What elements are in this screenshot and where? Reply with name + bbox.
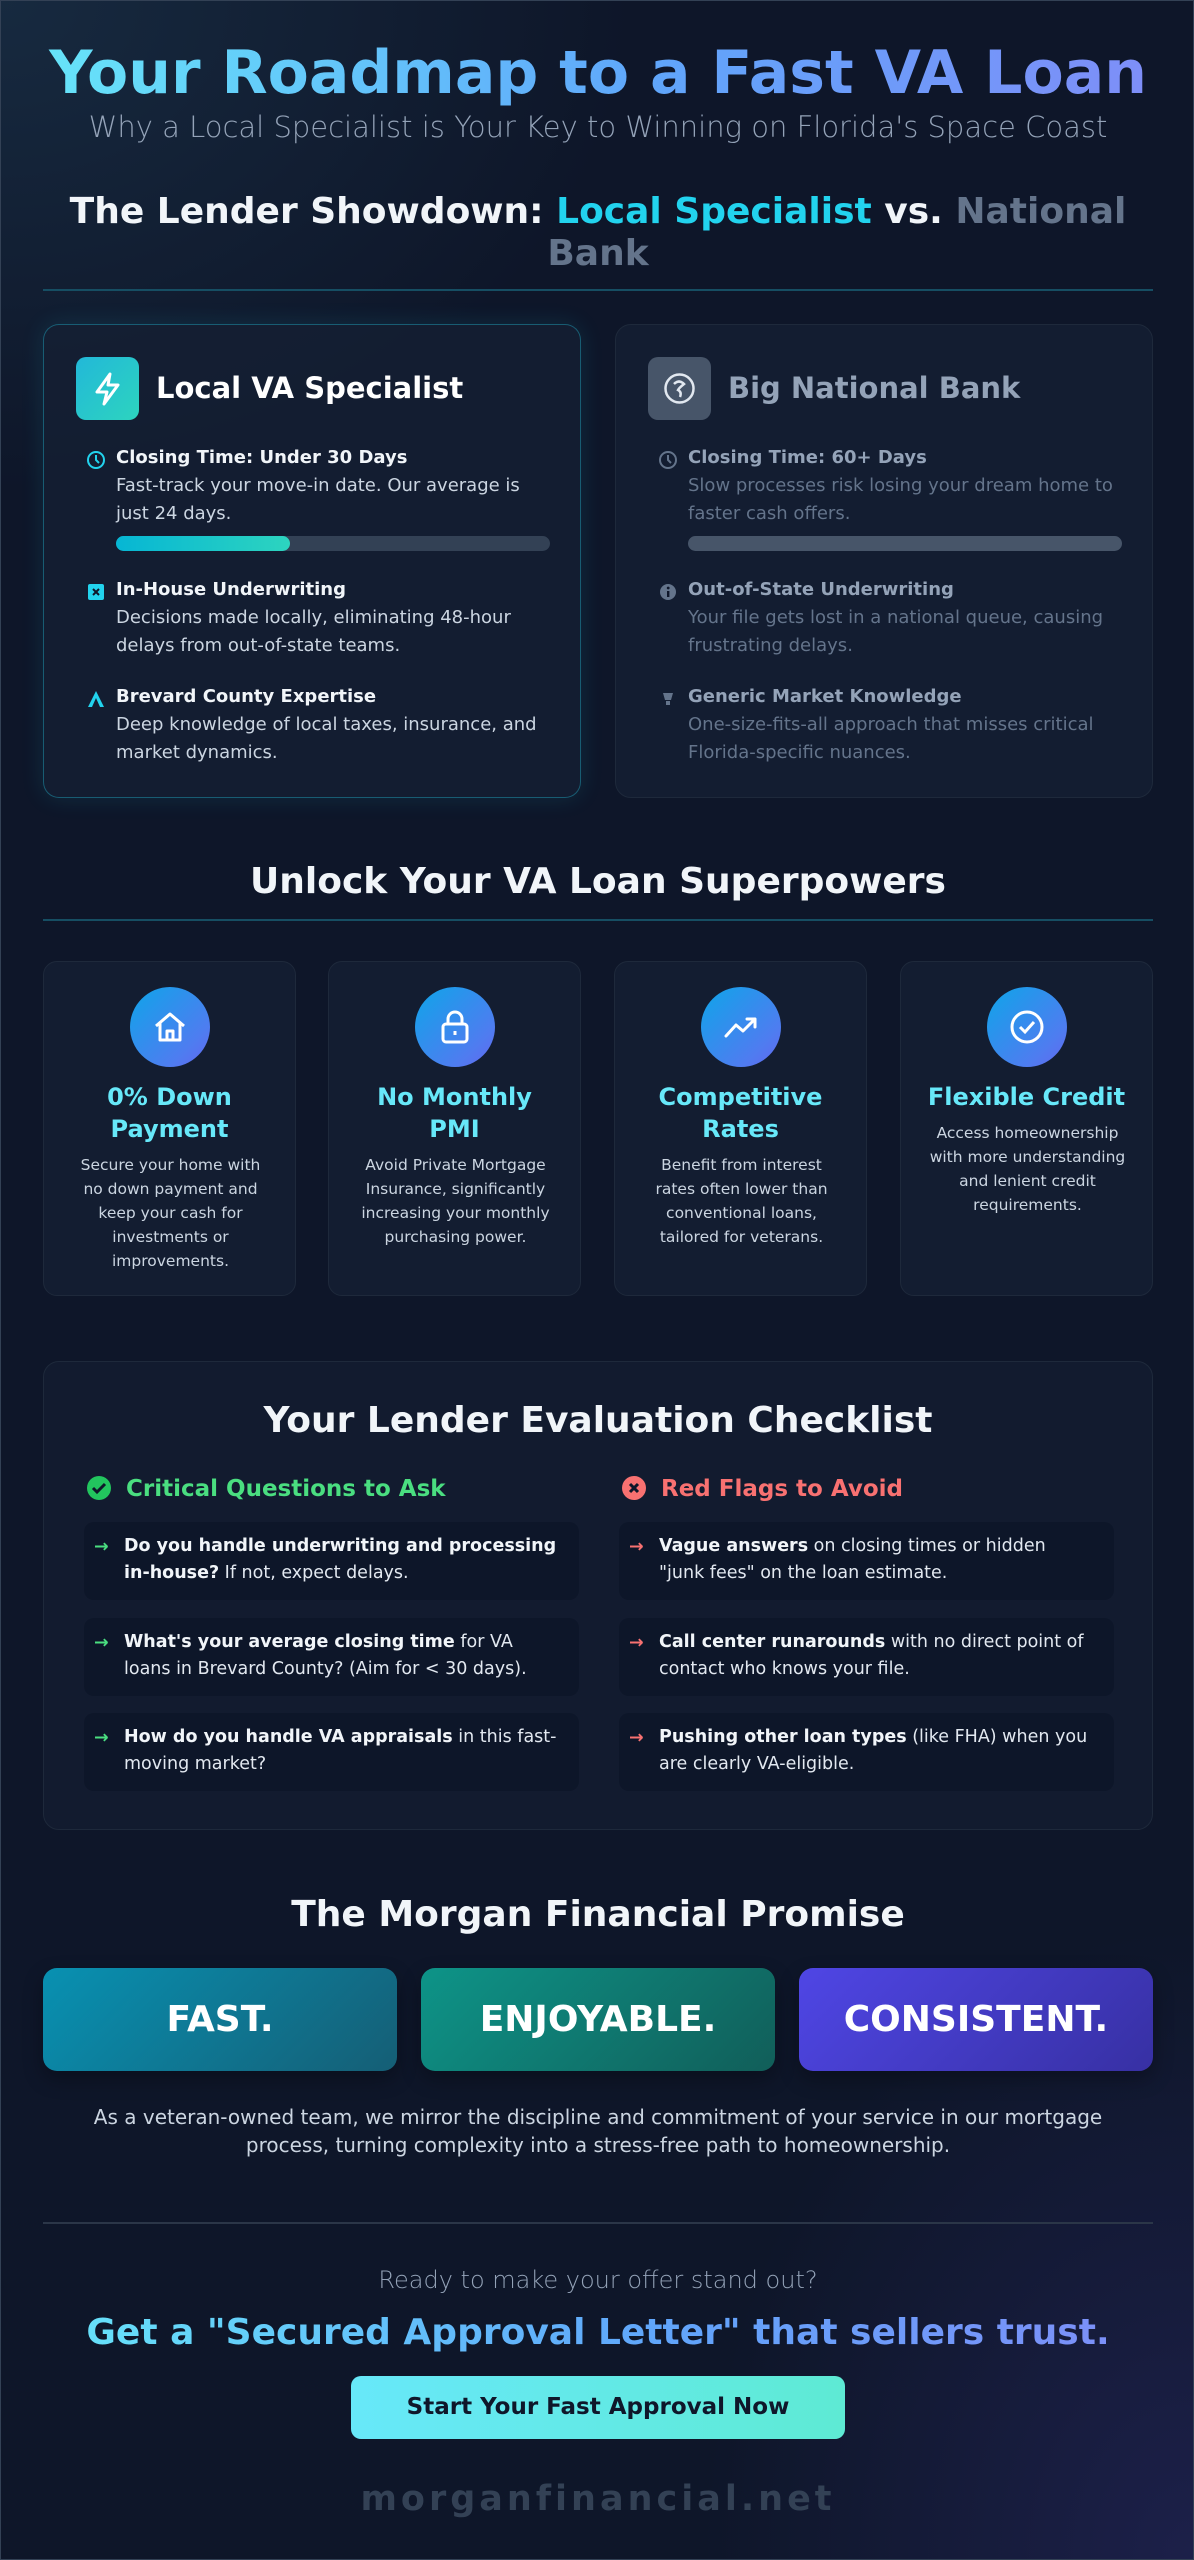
flag 2	[619, 1618, 1114, 1696]
flag 1: Vague answers on closing times or hidden "junk fees" on the loan estimate.	[659, 1536, 1046, 1583]
flag 2: →	[629, 1633, 644, 1653]
item: generic knowledge: Generic Market Knowledge	[688, 686, 962, 707]
cta prompt: Ready to make your offer stand out?	[378, 2266, 818, 2294]
card: no PMI: No Monthly	[377, 1083, 532, 1111]
flag 3	[619, 1713, 1114, 1791]
subtitle: Why a Local Specialist is Your Key to Winning on Florida's Space Coast	[89, 110, 1107, 144]
item: closing time	[87, 447, 550, 551]
card: no PMI: PMI	[429, 1115, 480, 1143]
promise: enjoyable	[421, 1968, 775, 2071]
item: in-house underwriting	[88, 579, 511, 656]
promise: fast: FAST.	[166, 1999, 274, 2040]
flag 3: Pushing other loan types (like FHA) when you are clearly VA-eligible.	[659, 1727, 1087, 1774]
card: flexible credit: Flexible Credit	[928, 1083, 1125, 1111]
question 1: →	[94, 1537, 109, 1557]
item: closing time: Fast-track your move-in date. Our average is just 24 days.	[116, 475, 520, 524]
footer url: morganfinancial.net	[360, 2479, 836, 2519]
card: competitive rates: Benefit from interest rates often lower than conventional loans, tailored for veterans.	[655, 1156, 828, 1246]
card title: Local VA Specialist	[156, 371, 463, 405]
progress bar	[688, 536, 1122, 551]
card: 0% down: 0% Down	[107, 1083, 232, 1111]
item: brevard expertise	[88, 686, 537, 763]
item: in-house underwriting: Decisions made locally, eliminating 48-hour delays from out-of-state teams.	[116, 607, 511, 656]
title: Your Roadmap to a Fast VA Loan	[49, 38, 1147, 108]
item: out-of-state	[660, 579, 1103, 656]
card title: Big National Bank	[728, 371, 1020, 405]
card: 0% down	[43, 961, 296, 1296]
heading: promise: The Morgan Financial Promise	[291, 1894, 905, 1935]
question 2	[84, 1618, 579, 1696]
panel: national bank	[615, 324, 1153, 798]
item: generic knowledge	[663, 686, 1094, 763]
question 3: →	[94, 1728, 109, 1748]
column heading: questions: Critical Questions to Ask	[126, 1476, 446, 1502]
promise: consistent	[799, 1968, 1153, 2071]
icon: check circle	[987, 987, 1067, 1067]
card: competitive rates: Rates	[702, 1115, 779, 1143]
card: flexible credit	[900, 961, 1153, 1296]
icon: trending up	[701, 987, 781, 1067]
panel: checklist	[43, 1361, 1153, 1830]
heading: superpowers: Unlock Your VA Loan Superpowers	[250, 861, 946, 902]
item: out-of-state: Your file gets lost in a national queue, causing frustrating delays.	[688, 607, 1103, 656]
flag 3: →	[629, 1728, 644, 1748]
question 2: What's your average closing time for VA loans in Brevard County? (Aim for < 30 days).	[124, 1632, 527, 1679]
question 3: How do you handle VA appraisals in this fast-moving market?	[124, 1727, 556, 1774]
flag 1: →	[629, 1537, 644, 1557]
promise: enjoyable: ENJOYABLE.	[480, 1999, 716, 2040]
item: closing time: Closing Time: Under 30 Days	[116, 447, 407, 468]
question 3	[84, 1713, 579, 1791]
promise: consistent: CONSISTENT.	[844, 1999, 1108, 2040]
card: competitive rates	[614, 961, 867, 1296]
question 1: Do you handle underwriting and processing in-house? If not, expect delays.	[124, 1536, 556, 1583]
checklist heading: Your Lender Evaluation Checklist	[264, 1400, 932, 1441]
cta heading: Get a "Secured Approval Letter" that sellers trust.	[86, 2312, 1110, 2353]
item: in-house underwriting: In-House Underwriting	[116, 579, 346, 600]
item: brevard expertise: Brevard County Expertise	[116, 686, 376, 707]
icon: house	[130, 987, 210, 1067]
item: closing time: Closing Time: 60+ Days	[688, 447, 927, 468]
icon: bank	[648, 357, 711, 420]
column heading: red flags: Red Flags to Avoid	[661, 1476, 903, 1502]
cta button: Start Your Fast Approval Now	[407, 2394, 789, 2420]
promise: fast	[43, 1968, 397, 2071]
card: 0% down: Secure your home with no down payment and keep your cash for investments or improvements.	[81, 1156, 260, 1270]
card: no PMI: Avoid Private Mortgage Insurance, significantly increasing your monthly purchasing power.	[361, 1156, 550, 1246]
question 2: →	[94, 1633, 109, 1653]
icon: lightning	[76, 357, 139, 420]
item: out-of-state: Out-of-State Underwriting	[688, 579, 954, 600]
card: 0% down: Payment	[111, 1115, 228, 1143]
question 1	[84, 1522, 579, 1600]
card: flexible credit: Access homeownership with more understanding and lenient credit requirements.	[930, 1124, 1125, 1214]
panel: local specialist	[43, 324, 581, 798]
progress bar	[116, 536, 550, 551]
promise text: As a veteran-owned team, we mirror the discipline and commitment of your service in our mortgage process, turning complexity into a stress-free path to homeownership.	[94, 2105, 1102, 2157]
cta button	[351, 2376, 845, 2439]
card: no PMI	[328, 961, 581, 1296]
item: generic knowledge: One-size-fits-all approach that misses critical Florida-specific nuances.	[688, 714, 1094, 763]
flag 1	[619, 1522, 1114, 1600]
item: closing time	[659, 447, 1122, 551]
item: brevard expertise: Deep knowledge of local taxes, insurance, and market dynamics.	[116, 714, 537, 763]
item: closing time: Slow processes risk losing your dream home to faster cash offers.	[688, 475, 1113, 524]
heading: lender showdown: The Lender Showdown: Local Specialist vs. National Bank	[70, 191, 1126, 274]
icon: lock	[415, 987, 495, 1067]
flag 2: Call center runarounds with no direct point of contact who knows your file.	[659, 1632, 1084, 1679]
card: competitive rates: Competitive	[659, 1083, 822, 1111]
